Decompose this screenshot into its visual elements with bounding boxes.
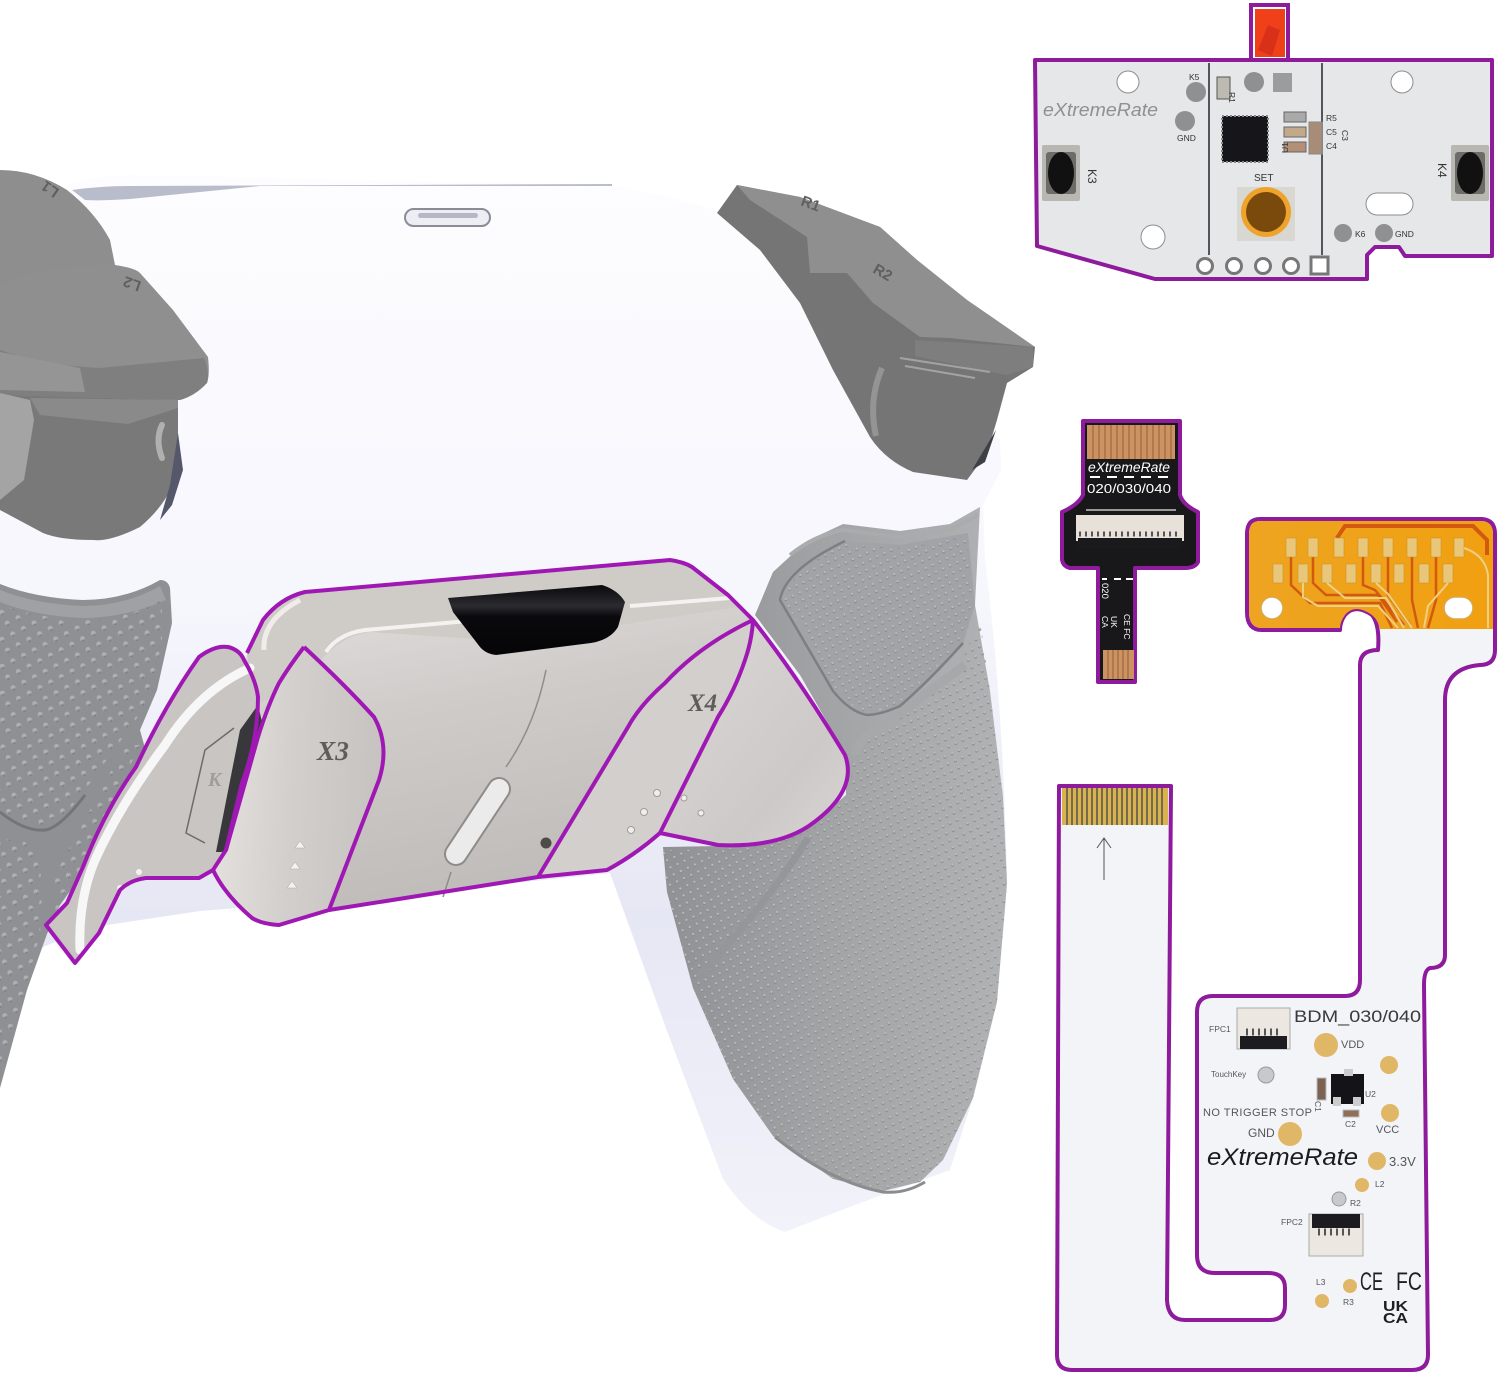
board labels: L2 xyxy=(1375,1179,1385,1189)
left thumbstick xyxy=(0,395,178,540)
dark orange traces xyxy=(1291,526,1487,628)
finger separators xyxy=(1093,425,1171,459)
back paddle plate xyxy=(215,560,753,910)
board logo: eXtremeRate xyxy=(1043,100,1158,120)
board labels: TouchKey xyxy=(1211,1070,1246,1079)
shoulder button labels xyxy=(38,177,143,294)
connector outline xyxy=(1062,421,1198,682)
grip base xyxy=(0,580,172,1088)
stick highlights xyxy=(900,358,990,378)
board labels: U1 xyxy=(1280,142,1290,153)
QFN chip xyxy=(1222,116,1268,162)
grip dots lower xyxy=(0,838,42,1080)
bottom copper fingers xyxy=(1103,650,1134,679)
U2 regulator xyxy=(1317,1069,1364,1117)
controller illustration xyxy=(0,170,1035,1232)
black slot xyxy=(448,585,625,655)
small screw hole xyxy=(540,838,552,848)
board labels: R3 xyxy=(1343,1297,1354,1307)
SET orange button xyxy=(1237,187,1295,241)
board labels: NO TRIGGER STOP xyxy=(1203,1107,1312,1119)
orange flex head xyxy=(1249,521,1493,629)
silver pads xyxy=(1258,1067,1346,1206)
top ridge shadow xyxy=(72,184,612,200)
lower labels xyxy=(1099,583,1132,640)
FPC1 socket xyxy=(1237,1008,1290,1049)
K4 tactile button xyxy=(1451,145,1489,201)
red flex tab xyxy=(1251,5,1288,61)
board labels: R2 xyxy=(1350,1198,1361,1208)
dark hinge gap xyxy=(216,705,262,852)
right lobe xyxy=(660,620,848,845)
gold test pads xyxy=(1278,1033,1399,1308)
head mounting holes xyxy=(1261,597,1473,619)
paddle label X3: X3 xyxy=(316,736,349,766)
board title: BDM_030/040 xyxy=(1294,1007,1421,1026)
insertion arrow xyxy=(1097,838,1111,880)
grip base xyxy=(663,507,1007,1191)
connector logo: eXtremeRate xyxy=(1088,459,1170,475)
board labels: GND xyxy=(1248,1126,1275,1140)
middle paddle X3 xyxy=(213,647,383,925)
board labels: K4 xyxy=(1435,163,1449,178)
left grip xyxy=(0,580,172,1088)
cable outline fill xyxy=(1057,519,1495,1370)
trigger base xyxy=(717,185,1035,480)
trigger lip xyxy=(915,340,1033,375)
board labels: K6 xyxy=(1355,229,1366,239)
grip dots xyxy=(663,620,1007,1190)
white highlight xyxy=(80,668,250,950)
shoulder button labels xyxy=(799,193,895,285)
paddle dots xyxy=(117,869,142,891)
white flex cable with orange head xyxy=(1057,519,1495,1370)
board labels: VCC xyxy=(1376,1124,1399,1136)
lower labels: UK xyxy=(1109,616,1119,628)
board labels: R1 xyxy=(1227,92,1237,103)
compliance marks xyxy=(1360,1268,1422,1327)
board logo: eXtremeRate xyxy=(1207,1144,1358,1171)
board labels: C4 xyxy=(1326,141,1337,151)
panel groove xyxy=(780,541,963,715)
gold contact pads xyxy=(1273,538,1464,583)
left shoulder buttons xyxy=(0,170,209,540)
compliance marks: UK xyxy=(1383,1298,1408,1315)
centre speaker slot xyxy=(405,209,490,226)
board labels: GND xyxy=(1177,133,1196,143)
upper left bumper xyxy=(0,170,115,300)
lower labels: CE FC xyxy=(1122,614,1132,640)
board labels: GND xyxy=(1395,229,1414,239)
solder pads xyxy=(1175,72,1393,242)
board labels: U2 xyxy=(1365,1089,1376,1099)
lower labels: CA xyxy=(1100,616,1110,628)
plate highlight xyxy=(326,598,730,652)
upper grip panel xyxy=(780,533,975,715)
white controller shell xyxy=(0,175,1007,1232)
board labels: 3.3V xyxy=(1389,1154,1416,1169)
mounting holes xyxy=(1117,71,1413,249)
compliance marks: CE xyxy=(1360,1268,1383,1296)
board labels: VDD xyxy=(1341,1039,1364,1051)
paddle letter: K xyxy=(207,769,223,791)
board labels: K5 xyxy=(1189,72,1200,82)
grip top rim xyxy=(790,515,978,555)
bottom rim xyxy=(775,1137,925,1192)
textured trigger face xyxy=(737,185,1035,347)
shoulder button labels: R1 xyxy=(799,193,822,215)
board labels: C2 xyxy=(1345,1119,1356,1129)
gold traces xyxy=(1303,548,1488,628)
paddle label X4: X4 xyxy=(687,690,717,717)
board labels: L3 xyxy=(1316,1277,1326,1287)
board labels: C1 xyxy=(1313,1101,1323,1112)
right grip xyxy=(663,507,1007,1192)
board outline xyxy=(1035,60,1492,279)
compliance marks: CA xyxy=(1383,1310,1408,1327)
FPC2 socket xyxy=(1309,1214,1363,1256)
gold finger gaps xyxy=(1067,788,1162,825)
right shoulder button xyxy=(717,185,1035,480)
board labels: SET xyxy=(1254,173,1273,184)
shoulder button labels: L1 xyxy=(38,177,62,201)
lower dashes xyxy=(1102,578,1133,580)
top copper fingers xyxy=(1087,425,1175,459)
FPC socket xyxy=(1076,510,1184,548)
shoulder button labels: R2 xyxy=(870,261,895,285)
centre seam xyxy=(443,670,546,897)
board labels xyxy=(1085,72,1449,239)
smooth groove bands xyxy=(700,838,808,975)
board labels: FPC1 xyxy=(1209,1024,1231,1034)
board labels: K3 xyxy=(1085,169,1099,184)
black flex connector xyxy=(1062,421,1198,682)
part number: 020/030/040 xyxy=(1087,481,1171,496)
board labels: FPC2 xyxy=(1281,1217,1303,1227)
connector dashes xyxy=(1090,476,1168,478)
K3 tactile button xyxy=(1042,145,1080,201)
board labels: C5 xyxy=(1326,127,1337,137)
shoulder button labels: L2 xyxy=(121,272,143,294)
lower labels: 020 xyxy=(1099,583,1110,599)
purple paddle outlines xyxy=(46,560,848,963)
top plate band xyxy=(247,560,745,705)
left paddle xyxy=(46,647,262,963)
paddle recess xyxy=(186,728,234,843)
right paddle X4 xyxy=(538,620,848,877)
compliance marks: FC xyxy=(1396,1268,1422,1296)
grip dots upper xyxy=(0,600,162,828)
lower left trigger xyxy=(0,265,209,400)
adjustment arrows xyxy=(287,841,305,888)
board labels: R5 xyxy=(1326,113,1337,123)
adjustment dots xyxy=(628,790,704,834)
board labels: C3 xyxy=(1340,130,1350,141)
gold edge fingers xyxy=(1062,788,1168,825)
X4 centre wedge xyxy=(538,620,753,877)
bottom finger separators xyxy=(1108,650,1128,679)
top control PCB xyxy=(1035,5,1492,279)
slider switch xyxy=(456,789,499,854)
section dividers xyxy=(1209,63,1322,255)
bottom through holes xyxy=(1198,257,1328,274)
board labels xyxy=(1203,1024,1416,1307)
